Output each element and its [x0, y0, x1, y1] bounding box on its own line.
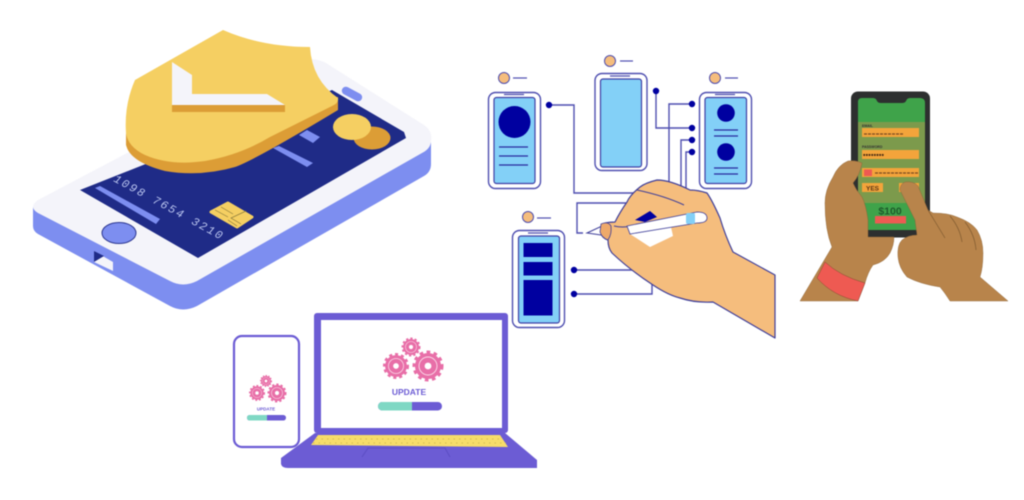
charging port — [94, 251, 113, 271]
keyboard — [311, 435, 508, 447]
pen — [587, 212, 707, 236]
card field — [862, 168, 919, 177]
card stripes — [273, 146, 313, 167]
wristband — [817, 262, 865, 301]
card number: 1098 7654 3210 — [111, 173, 225, 243]
finger crease — [614, 190, 684, 227]
wireframe phone: two items — [700, 72, 752, 188]
speaker pill — [340, 85, 364, 103]
form area — [858, 122, 925, 203]
wireframe phone: blocks — [512, 212, 564, 328]
left hand — [800, 161, 894, 301]
wireframe phone: profile — [488, 72, 540, 188]
illustration: hands holding phone with login form — [800, 92, 1008, 301]
laptop base — [281, 433, 537, 468]
illustration: phone with payment card and shield — [33, 30, 431, 310]
shield — [126, 30, 338, 173]
illustration: phone and laptop software update — [234, 313, 537, 468]
password field — [862, 145, 919, 160]
phone frame — [851, 92, 930, 238]
check mark — [172, 62, 285, 112]
card chip — [211, 203, 252, 227]
gap between fingers — [630, 227, 673, 247]
laptop update label: UPDATE — [392, 387, 426, 397]
phone update label: UPDATE — [257, 406, 275, 412]
phone top face — [33, 59, 431, 284]
thumb — [600, 223, 611, 240]
right hand finger creases — [928, 210, 976, 250]
home button — [102, 222, 136, 244]
yes button — [862, 183, 883, 192]
pay button — [875, 216, 906, 224]
password field: •••••••• — [863, 152, 885, 160]
email field: EMAIL — [862, 124, 874, 128]
illustration: hand sketching app wireframes — [488, 56, 775, 338]
phone screen — [858, 98, 925, 230]
navy shape behind pen — [635, 211, 657, 222]
laptop screen — [321, 320, 502, 428]
phone progress bar — [247, 415, 286, 420]
laptop progress bar — [378, 402, 442, 410]
laptop lid — [314, 313, 508, 433]
amount: $100 — [878, 206, 902, 218]
drawing hand — [600, 180, 775, 338]
laptop gears — [385, 339, 442, 380]
update phone — [234, 336, 299, 447]
connector dots — [546, 88, 695, 297]
wireframe phone: blank — [595, 56, 647, 170]
phone body side — [33, 140, 431, 310]
phone gears — [250, 376, 285, 401]
card screen — [80, 90, 406, 258]
password field: PASSWORD — [862, 145, 883, 149]
card logo coins — [333, 114, 390, 150]
right hand — [898, 182, 1008, 301]
second button — [899, 183, 919, 192]
email field — [862, 124, 919, 137]
connector lines — [549, 91, 692, 294]
yes button: YES — [866, 186, 880, 192]
card name bar — [95, 186, 160, 224]
trackpad — [362, 448, 450, 457]
